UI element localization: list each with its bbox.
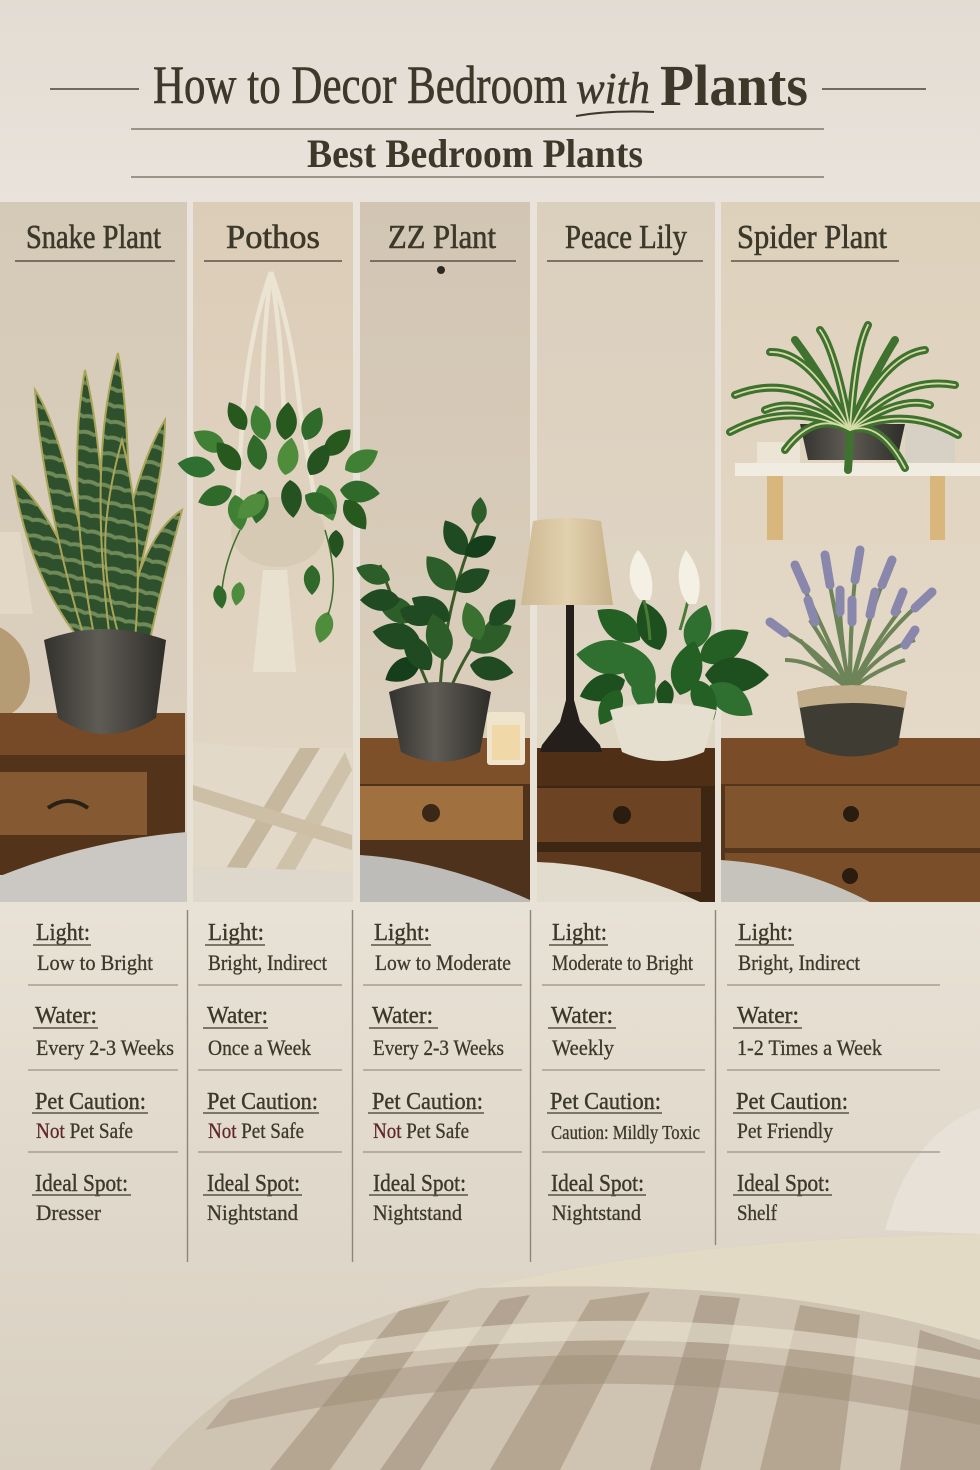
table: pothos: Water: [207,1003,268,1029]
table: spider plant: Water: [737,1003,799,1029]
bed [360,855,530,902]
table: snake plant: Ideal Spot: [35,1171,128,1197]
dresser [721,738,980,902]
panel: snake plant [0,202,187,902]
table: spider plant: Ideal Spot: [737,1171,830,1197]
pothos hanger and plant [176,272,383,672]
dresser [0,713,185,875]
nightstand [360,738,530,902]
table: spider plant: Shelf [737,1200,778,1225]
pillow [193,742,352,872]
spider plant pot [800,424,905,460]
shelf [735,463,980,540]
panel: peace lily [537,202,715,902]
table: zz plant: Nightstand [373,1200,462,1225]
pot [44,629,166,734]
table: peace lily: Weekly [552,1035,614,1060]
table: zz plant: Every 2-3 Weeks [373,1035,504,1060]
table: pothos: Ideal Spot: [207,1171,300,1197]
table: pothos: Nightstand [207,1200,298,1225]
peace lily plant [575,550,769,761]
table: zz plant: Ideal Spot: [373,1171,466,1197]
zz plant [353,496,522,762]
title: with [576,64,650,113]
candle [487,712,525,765]
table: zz plant: Water: [372,1003,433,1029]
lavender pot [797,685,907,756]
panel: pothos [193,202,353,902]
bed [225,867,295,870]
table: pothos: Bright, Indirect [208,950,327,975]
basket [610,703,716,761]
title: How to Decor Bedroom [153,55,567,115]
table: snake plant: Light: [36,920,90,946]
table: pothos: Pet Caution: [207,1089,318,1115]
title: Plants [660,53,808,118]
bed [0,832,187,902]
table: snake plant: Low to Bright [37,950,153,975]
table: spider plant: 1-2 Times a Week [737,1035,882,1060]
table: peace lily: Water: [551,1003,613,1029]
lamp [521,518,613,752]
table: peace lily: Light: [552,920,607,946]
panel: spider plant [721,202,980,902]
pot [389,682,491,762]
table: spider plant: Light: [738,920,793,946]
bed [537,862,700,902]
table: peace lily [542,920,705,1225]
snake plant leaves [13,353,182,640]
column dividers [188,910,716,1262]
table: zz plant: Light: [374,920,430,946]
column headings: Snake Plant [26,219,161,256]
table: snake plant [28,920,178,1225]
table: snake plant: Every 2-3 Weeks [36,1035,174,1060]
table: pothos: Light: [208,920,264,946]
lavender [770,550,932,756]
table: spider plant: Pet Caution: [736,1089,848,1115]
table: pothos: Not Pet Safe [208,1118,304,1143]
table: spider plant [727,920,940,1225]
lamp [0,532,33,713]
table: zz plant: Pet Caution: [372,1089,483,1115]
table: pothos: Once a Week [208,1035,311,1060]
spider plant leaves [730,325,958,470]
table: snake plant: Dresser [36,1200,102,1225]
table: peace lily: Pet Caution: [550,1089,661,1115]
table: zz plant: Not Pet Safe [373,1118,469,1143]
small pots [757,425,955,463]
table: snake plant: Pet Caution: [35,1089,146,1115]
column headings: Peace Lily [565,219,687,256]
column headings: ZZ Plant [388,219,496,256]
table: spider plant: Bright, Indirect [738,950,860,975]
bed foreground [150,1108,980,1470]
table: pothos [198,920,342,1225]
table: zz plant: Low to Moderate [375,950,511,975]
table: spider plant: Pet Friendly [737,1118,833,1143]
column headings: Spider Plant [737,219,887,256]
table: peace lily: Moderate to Bright [552,950,693,975]
column headings [15,219,899,274]
column headings: Pothos [226,219,320,256]
table: peace lily: Ideal Spot: [551,1171,644,1197]
table: snake plant: Water: [35,1003,97,1029]
nightstand [537,748,715,902]
table: snake plant: Not Pet Safe [36,1118,133,1143]
table: peace lily: Nightstand [552,1200,641,1225]
table: zz plant [363,920,522,1225]
panel: zz plant [360,202,530,902]
title [50,53,926,118]
bed [721,860,870,902]
table: peace lily: Caution: Mildly Toxic [551,1122,700,1144]
subtitle: Best Bedroom Plants [307,131,643,176]
